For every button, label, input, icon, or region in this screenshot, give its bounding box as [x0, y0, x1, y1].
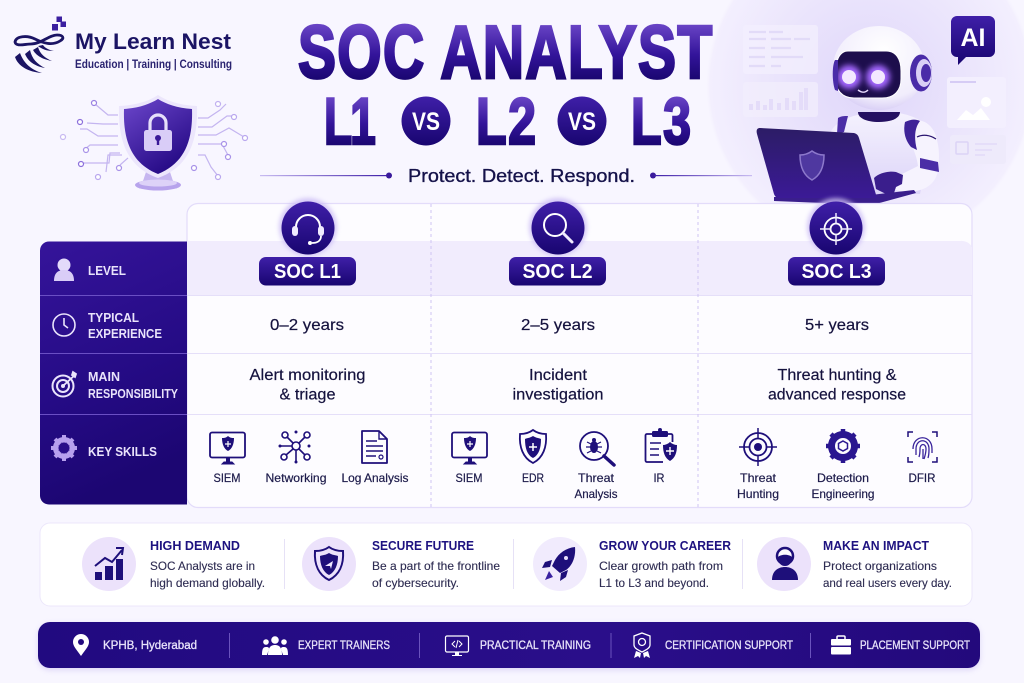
- icon: crosshair: [807, 198, 865, 256]
- title line 2: L3: [631, 85, 691, 159]
- robot head: [833, 26, 932, 110]
- panel: bar chart: [743, 82, 818, 117]
- skill: Threat Analysis: Analysis: [574, 487, 618, 501]
- skill: Networking: [266, 430, 326, 485]
- logo: My Learn Nest: [15, 16, 232, 73]
- skill: SIEM: [452, 432, 487, 485]
- title line 2: VS: [412, 108, 440, 136]
- badge: SOC L3: [788, 257, 885, 286]
- skill: IR: IR: [654, 471, 665, 485]
- row: key skills: [51, 435, 157, 461]
- row: level: LEVEL: [88, 264, 126, 278]
- footer: practical training: PRACTICAL TRAINING: [480, 640, 591, 652]
- responsibility: Incident: [529, 367, 588, 384]
- experience: 5+ years: [805, 317, 869, 334]
- title line 2: VS: [568, 108, 596, 136]
- row: level: [54, 258, 126, 281]
- title: [298, 12, 712, 159]
- responsibility: advanced response: [768, 386, 906, 404]
- responsibility: Alert monitoring: [250, 367, 366, 384]
- padlock icon: [144, 115, 172, 151]
- title line 2: L1: [324, 85, 376, 159]
- benefit: grow your career: GROW YOUR CAREER: [599, 539, 731, 553]
- logo mark: [15, 16, 66, 73]
- skill: EDR: EDR: [522, 471, 544, 485]
- benefit: secure future: of cybersecurity.: [372, 576, 459, 590]
- illustration: security shield with circuit lines: [60, 95, 248, 190]
- panel: benefits: [40, 523, 972, 606]
- responsibility: Threat hunting &: [778, 367, 897, 384]
- benefit: grow your career: Clear growth path from: [599, 559, 723, 573]
- skill: Log Analysis: [342, 431, 408, 485]
- shield: [119, 95, 197, 178]
- title line 1: SOC ANALYST: [298, 12, 712, 95]
- laptop: [757, 128, 916, 205]
- badge: SOC L1: SOC L1: [274, 261, 341, 283]
- skill: DFIR: DFIR: [908, 471, 936, 485]
- panel: log list: [743, 25, 818, 74]
- responsibility: investigation: [512, 386, 604, 404]
- benefit: high demand: HIGH DEMAND: [150, 539, 240, 553]
- responsibility: [512, 367, 604, 404]
- robot illustration: [757, 26, 939, 205]
- ghost dashboard panels: [743, 25, 1006, 164]
- column dividers: [431, 204, 698, 507]
- responsibility: & triage: [280, 386, 336, 404]
- panel: image card: [947, 77, 1006, 128]
- panel: row labels: [40, 242, 187, 504]
- footer: location: KPHB, Hyderabad: [103, 640, 197, 652]
- footer: expert trainers: [262, 636, 390, 655]
- robot neck collar: [858, 112, 900, 122]
- skill: Threat Analysis: [574, 432, 618, 501]
- brand name: My Learn Nest: [75, 29, 231, 54]
- footer: certification support: [634, 633, 793, 658]
- benefit: grow your career: L1 to L3 and beyond.: [599, 576, 709, 590]
- responsibility: [768, 367, 906, 404]
- benefit: high demand: high demand globally.: [150, 576, 265, 590]
- benefit: make an impact: and real users every day.: [823, 576, 952, 590]
- laptop shield emblem: [800, 151, 824, 180]
- row: main responsibility: MAIN: [88, 370, 120, 384]
- benefit: high demand: [82, 537, 265, 591]
- column: SOC L1: [210, 198, 408, 485]
- row: main responsibility: [52, 370, 179, 401]
- row: key skills: KEY SKILLS: [88, 445, 157, 459]
- badge: SOC L2: [509, 257, 606, 286]
- comparison table card: [187, 204, 972, 508]
- benefit: grow your career: [533, 537, 731, 591]
- column: SOC L2: [452, 198, 677, 501]
- skill: Threat Hunting: Hunting: [737, 487, 779, 501]
- row: typical experience: [53, 311, 162, 341]
- circuit lines: [60, 100, 248, 180]
- footer: expert trainers: EXPERT TRAINERS: [298, 640, 390, 652]
- skill: Threat Hunting: Threat: [740, 471, 777, 485]
- skill: EDR: [520, 430, 546, 485]
- benefit: secure future: [302, 537, 500, 591]
- benefit: secure future: Be a part of the frontline: [372, 559, 500, 573]
- skill: Log Analysis: Log Analysis: [342, 471, 408, 485]
- skill: Networking: Networking: [266, 471, 326, 485]
- footer: certification support: CERTIFICATION SUPPORT: [665, 640, 793, 652]
- icon: headset: [279, 198, 337, 256]
- experience: 0–2 years: [270, 317, 344, 334]
- row: main responsibility: RESPONSIBILITY: [88, 387, 179, 401]
- benefit: secure future: SECURE FUTURE: [372, 539, 474, 553]
- skill: Threat Analysis: Threat: [578, 471, 615, 485]
- skill: SIEM: SIEM: [456, 471, 482, 485]
- row: typical experience: EXPERIENCE: [88, 327, 162, 341]
- robot hand: [874, 172, 903, 194]
- skill: SIEM: [210, 432, 245, 485]
- row: typical experience: TYPICAL: [88, 311, 139, 325]
- skill: Detection Engineering: Detection: [817, 471, 869, 485]
- skill: DFIR: [908, 432, 937, 485]
- skill: Detection Engineering: Engineering: [812, 487, 874, 501]
- tagline with lines: [260, 165, 752, 186]
- badge: SOC L1: [259, 257, 356, 286]
- row dividers: [187, 296, 972, 414]
- skill: Threat Hunting: [737, 428, 779, 501]
- brand tagline: Education | Training | Consulting: [75, 59, 232, 71]
- shield stand: [135, 172, 181, 190]
- badge: SOC L3: SOC L3: [802, 261, 872, 283]
- benefit: make an impact: MAKE AN IMPACT: [823, 539, 929, 553]
- footer: location: [73, 634, 197, 656]
- column: SOC L3: [737, 198, 937, 501]
- title line 2: [324, 85, 691, 159]
- skill: IR: [646, 428, 677, 485]
- experience: 2–5 years: [521, 317, 595, 334]
- robot torso: [830, 112, 932, 194]
- AI speech badge: AI: [960, 24, 986, 52]
- title line 2: L2: [476, 85, 536, 159]
- panel: small card: [950, 135, 1006, 164]
- badge: SOC L2: SOC L2: [522, 261, 592, 283]
- robot background glow: [705, 0, 1024, 250]
- AI speech badge: [951, 16, 995, 65]
- footer: placement support: PLACEMENT SUPPORT: [860, 640, 970, 652]
- responsibility: [250, 367, 366, 404]
- benefit: high demand: SOC Analysts are in: [150, 559, 255, 573]
- footer: practical training: [446, 636, 591, 656]
- footer bar: [38, 622, 980, 670]
- level band: [187, 241, 972, 295]
- robot right arm: [894, 120, 939, 192]
- skill: Detection Engineering: [812, 429, 874, 501]
- tagline with lines: Protect. Detect. Respond.: [408, 165, 635, 186]
- benefit: make an impact: [757, 537, 952, 591]
- benefit: make an impact: Protect organizations: [823, 559, 937, 573]
- icon: magnifier: [529, 198, 587, 256]
- skill: SIEM: SIEM: [214, 471, 240, 485]
- footer: placement support: [831, 636, 970, 654]
